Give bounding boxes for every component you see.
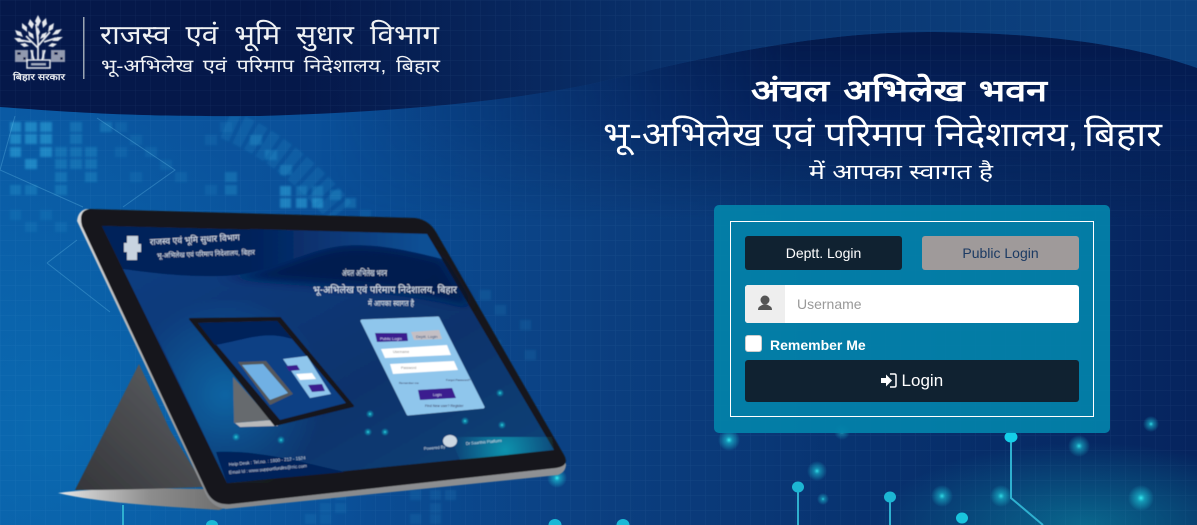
- welcome heading line 2: बिहार: [1084, 115, 1163, 154]
- mini tablet: [190, 318, 353, 427]
- mini login card: [362, 318, 483, 414]
- background: gear arc: [226, 124, 340, 212]
- mini login card: Public Login: [380, 336, 402, 341]
- circuit nodes bottom centre and left: [123, 468, 630, 525]
- button: public login tab: [922, 236, 1079, 270]
- mini dark area under wave: [220, 245, 470, 305]
- mini login card: Username: [393, 350, 409, 354]
- remember me label: Remember Me: [770, 337, 866, 353]
- circuit nodes bottom right: [718, 416, 1159, 525]
- background: thin circuit outlines: [0, 116, 175, 312]
- header title: राजस्व एवं भूमि सुधार विभाग: [100, 19, 440, 52]
- welcome heading line 3: में आपका स्वागत है: [809, 160, 994, 184]
- checkbox: [745, 335, 762, 352]
- mini help desk text: [229, 455, 307, 475]
- logo: Bihar emblem: [12, 15, 65, 82]
- mini help desk text: Help Desk : Tel.no. : 1800 - 212 - 1524: [229, 455, 306, 467]
- mini help desk text: Email Id : www.supportfordlrs@nic.com: [229, 463, 307, 475]
- mini glow dots: [232, 389, 506, 444]
- emblem caption: बिहार सरकार: [12, 71, 65, 82]
- teal glow at bottom right: [870, 440, 1197, 525]
- mini login card: Password: [401, 366, 416, 370]
- mini header text: में आपका स्वागत है: [368, 298, 415, 308]
- mini header text: [150, 231, 458, 308]
- button: departmental login tab: [745, 236, 902, 270]
- button: login: Login: [902, 371, 943, 390]
- mini header wave: [102, 226, 442, 276]
- welcome heading line 2: भू-अभिलेख एवं परिमाप निदेशालय,: [603, 115, 1078, 156]
- mini header text: अंचल अभिलेख भवन: [342, 267, 388, 278]
- tablet illustration: [58, 209, 566, 510]
- mini powered by: [424, 435, 503, 451]
- mini central glow: [140, 300, 360, 483]
- mini powered by: Powered By: [424, 444, 446, 451]
- dark swoosh under the wave: [400, 32, 1197, 198]
- panel: inner white border: [730, 221, 1094, 417]
- mini powered by: Dr Saarthis Platform: [466, 438, 503, 446]
- mini header text: भू-अभिलेख एवं परिमाप निदेशालय, बिहार: [157, 248, 255, 260]
- mini login card: Deptt. Login: [416, 334, 438, 339]
- mini login card: Find New user? Register: [425, 404, 464, 408]
- mini header text: भू-अभिलेख एवं परिमाप निदेशालय, बिहार: [313, 284, 458, 296]
- button: departmental login tab: Deptt. Login: [786, 245, 861, 261]
- button: public login tab: Public Login: [962, 245, 1039, 261]
- mini top-right light strip: [250, 229, 442, 272]
- mini bottom wave: [216, 452, 345, 483]
- icon: user: [745, 285, 785, 323]
- mini login card: Forgot Password?: [446, 378, 471, 382]
- welcome heading line 1: अंचल अभिलेख भवन: [751, 73, 1049, 108]
- logo divider: [83, 17, 84, 79]
- mini login card: Login: [433, 393, 442, 397]
- placeholder text: Username: [797, 296, 862, 312]
- panel: login form: [714, 205, 1110, 433]
- header band above the wave: [0, 0, 1197, 116]
- silver edge: [77, 209, 566, 509]
- background: pixel tiles: [10, 122, 536, 524]
- base sheet: [58, 488, 225, 510]
- soft blue glow at left: [0, 0, 500, 525]
- tablet bezel: [81, 209, 566, 504]
- kickstand: [75, 364, 205, 490]
- mini teal glow: [450, 437, 554, 460]
- button: login: [745, 360, 1079, 402]
- mini emblem: [124, 236, 141, 260]
- input: username: [745, 285, 1079, 323]
- emblem tree: [14, 15, 65, 68]
- tablet screen: [102, 226, 554, 483]
- header subtitle: भू-अभिलेख एवं परिमाप निदेशालय, बिहार: [101, 55, 441, 77]
- mini header text: राजस्व एवं भूमि सुधार विभाग: [150, 231, 241, 248]
- mini login card: Remember me: [399, 381, 419, 385]
